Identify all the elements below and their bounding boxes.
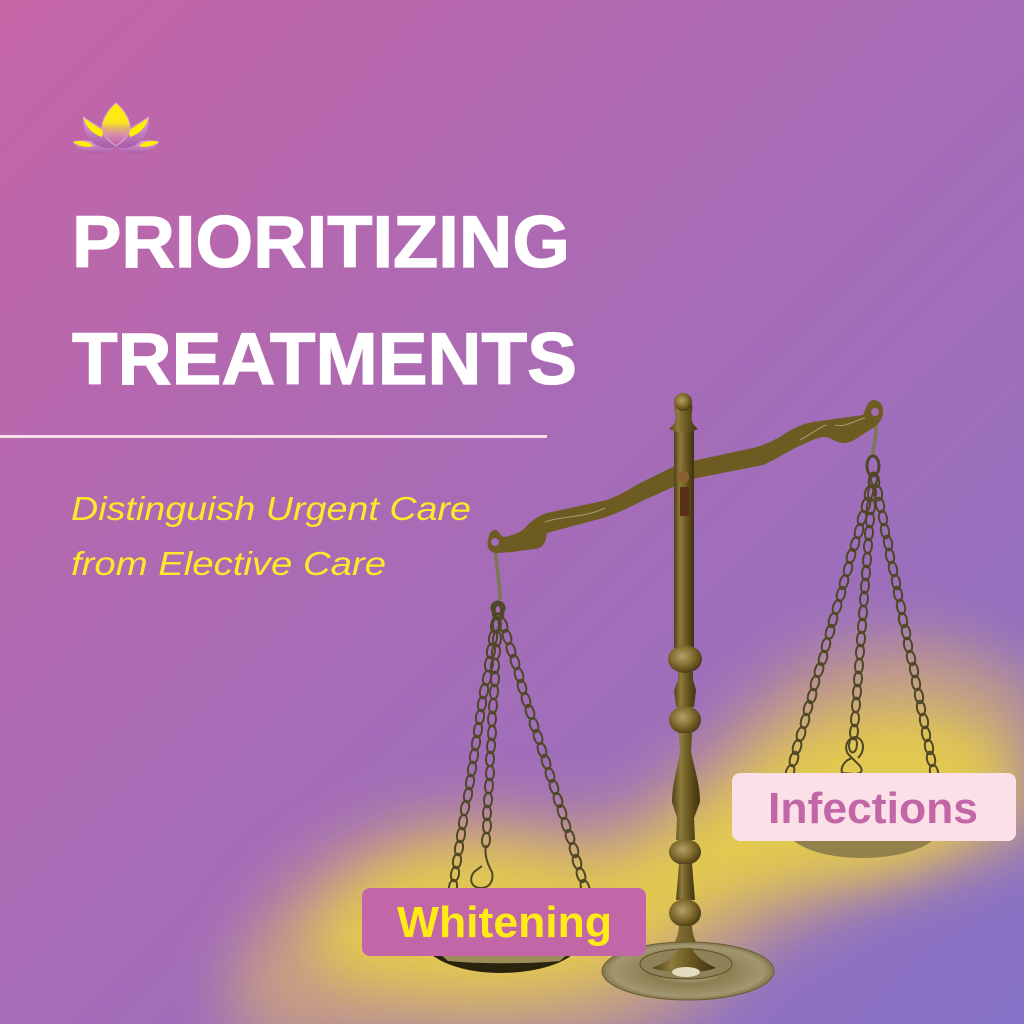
pivot pin <box>677 471 689 516</box>
balance scale <box>432 393 934 1000</box>
right pan <box>794 841 932 858</box>
right hanger and chains <box>790 413 934 774</box>
label: Infections: Infections <box>768 784 978 833</box>
ring holes on beam <box>491 408 879 546</box>
beam engraving <box>545 418 865 522</box>
left hanger and chains <box>453 543 585 888</box>
icon: lotus logo <box>73 103 159 154</box>
glow halo behind scale <box>230 641 1024 1024</box>
subtitle: Distinguish Urgent Care <box>71 490 471 527</box>
label: Whitening <box>362 888 646 956</box>
label: Whitening: Whitening <box>397 898 612 947</box>
subtitle <box>71 490 471 582</box>
base <box>602 942 774 1000</box>
beam <box>487 400 883 553</box>
post <box>674 430 694 648</box>
subtitle: from Elective Care <box>71 545 386 582</box>
turned column <box>642 645 728 970</box>
label: Infections <box>732 773 1016 841</box>
finial <box>669 393 698 432</box>
title: TREATMENTS <box>72 319 577 400</box>
left pan <box>432 954 572 973</box>
title: PRIORITIZING <box>72 202 570 283</box>
yellow glow core <box>315 711 1008 994</box>
title <box>72 202 577 400</box>
